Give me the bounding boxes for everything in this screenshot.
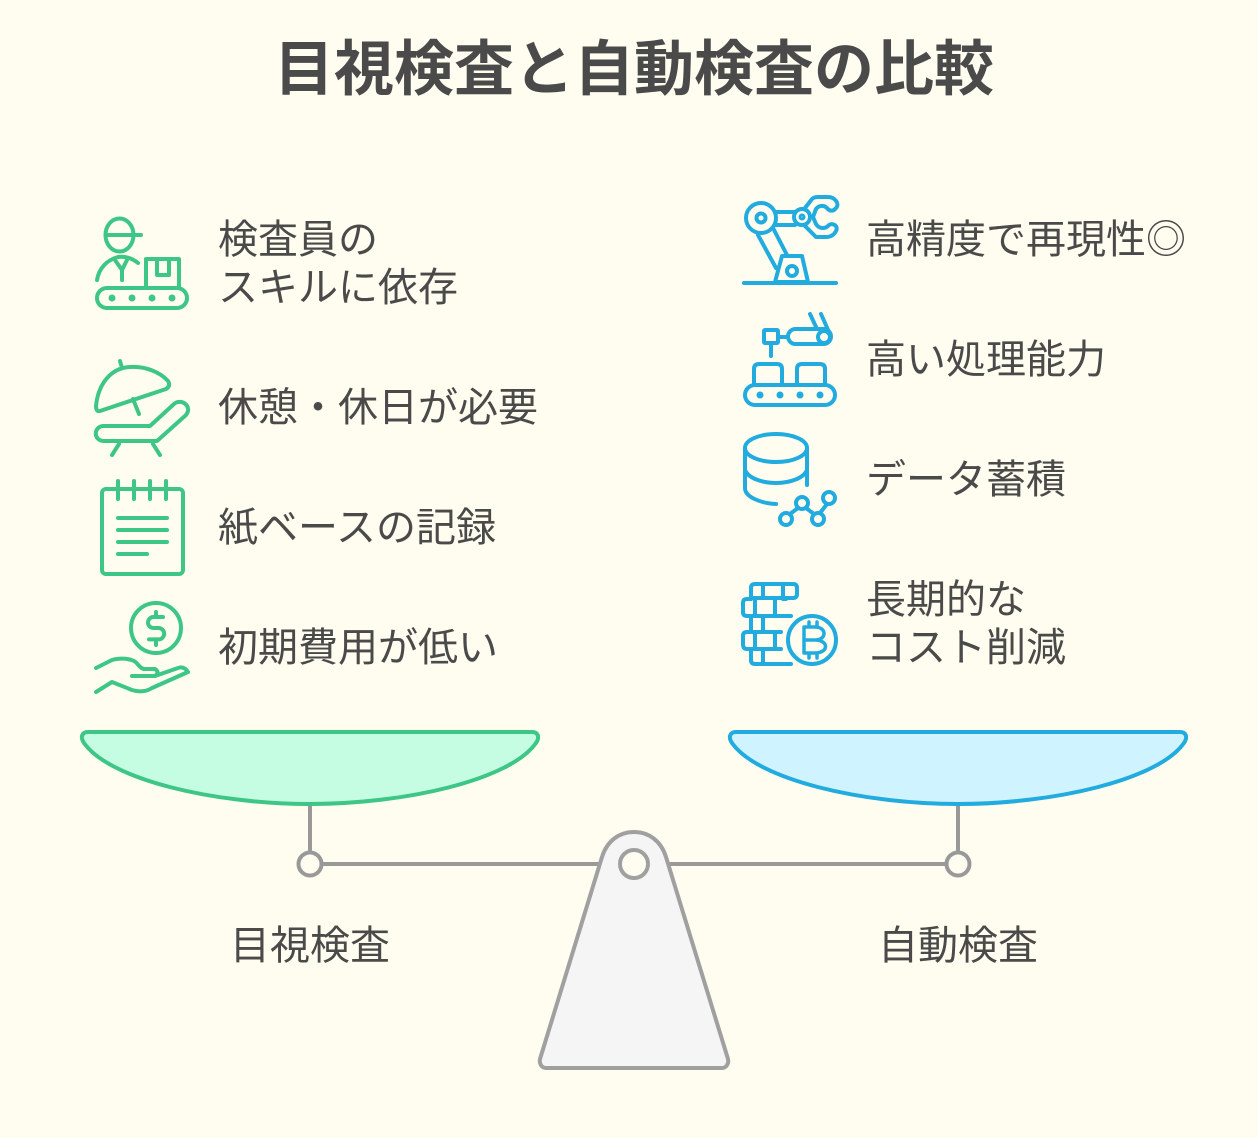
icon: database with graph: [745, 434, 835, 525]
icon: brick stack with coin: [743, 584, 836, 664]
icon: lounger and parasol: [96, 361, 188, 455]
left pan: [82, 732, 538, 804]
icon: inspector at conveyor: [97, 218, 187, 308]
icon: hand with coin: [96, 603, 188, 692]
text: high throughput: 高い処理能力: [866, 338, 1106, 382]
text: inspector skill: 検査員の: [218, 218, 378, 262]
text: inspector skill: スキルに依存: [218, 266, 458, 310]
title: 目視検査と自動検査の比較: [274, 36, 994, 103]
text: long-term cost reduction: 長期的な: [866, 578, 1026, 622]
pedestal: [540, 832, 728, 1068]
right pan: [730, 732, 1186, 804]
icon: notebook: [102, 481, 183, 574]
text: breaks needed: 休憩・休日が必要: [218, 386, 538, 430]
text: long-term cost reduction: コスト削減: [866, 626, 1066, 670]
label: automated inspection: 自動検査: [878, 924, 1038, 968]
text: low initial cost: 初期費用が低い: [218, 626, 498, 670]
icon: robot and conveyor: [745, 314, 835, 405]
icon: robot arm: [744, 197, 837, 283]
text: high precision: 高精度で再現性◎: [866, 218, 1186, 262]
scale beam and stems: [298, 803, 970, 876]
text: data accumulation: データ蓄積: [866, 458, 1066, 502]
label: visual inspection: 目視検査: [230, 924, 390, 968]
text: paper records: 紙ベースの記録: [218, 506, 496, 550]
